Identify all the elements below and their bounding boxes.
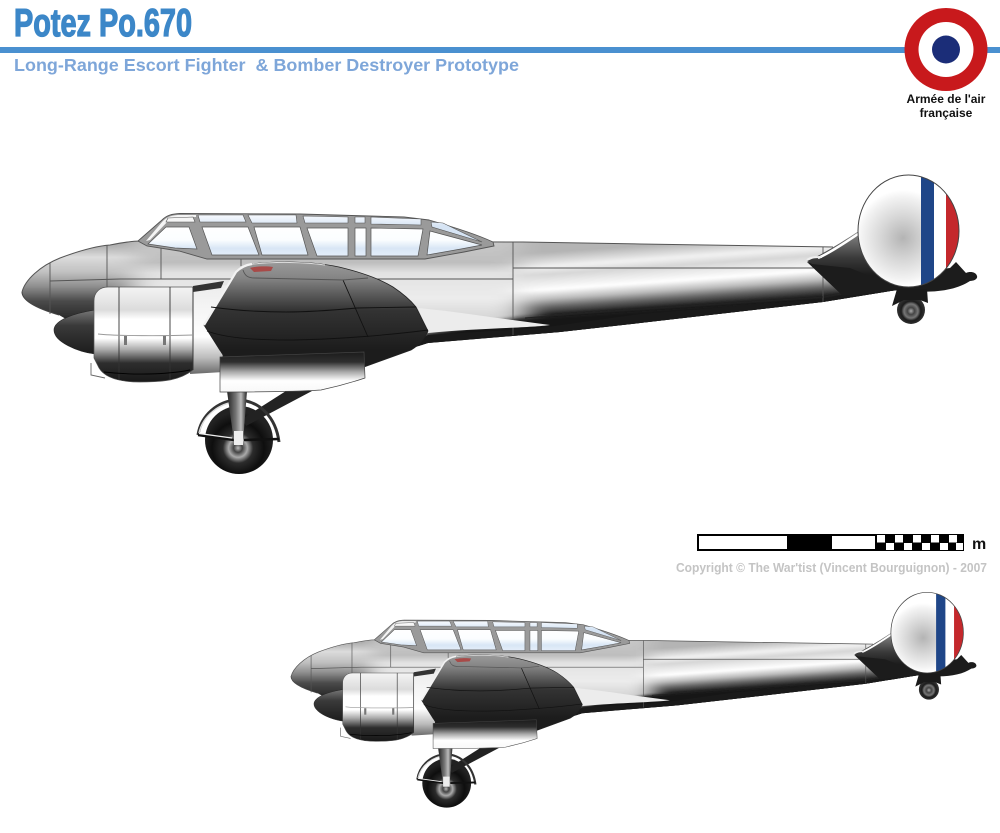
scale unit: m: [972, 536, 986, 553]
tail fin with French flag stripes: [858, 170, 961, 295]
roundel caption: française: [920, 106, 973, 120]
icon: red hatch: [250, 266, 273, 272]
roundel caption: Armée de l'air: [907, 92, 986, 106]
copyright: Copyright © The War'tist (Vincent Bourguignon) - 2007: [676, 561, 987, 575]
scale bar: [697, 534, 964, 551]
landing gear door: [220, 352, 365, 392]
fuselage: [0, 235, 920, 360]
nacelle rear section: [190, 284, 236, 374]
title: Potez Po.670: [14, 2, 192, 45]
exhaust outline: [91, 363, 105, 378]
tail wheel: [892, 289, 928, 324]
cockpit canopy: [138, 214, 494, 259]
main landing gear: [198, 391, 312, 474]
white wing fillet flash: [418, 308, 550, 333]
panel lines: [50, 242, 825, 335]
propeller spinner: [54, 310, 95, 354]
small aircraft side view: [246, 589, 976, 808]
canopy windows: [148, 227, 482, 256]
canopy upper glazing: [166, 215, 482, 242]
large aircraft side view: [0, 170, 977, 474]
header rule: [0, 47, 1000, 53]
tail cone and fillet: [807, 231, 977, 296]
icon: French air force roundel: [904, 8, 988, 91]
subtitle: Long-Range Escort Fighter & Bomber Destroyer Prototype: [14, 55, 519, 75]
engine nacelle: [94, 287, 193, 382]
wing section: [204, 262, 428, 376]
wing panel lines: [207, 270, 428, 340]
checker section: [877, 535, 963, 550]
roundel caption: [907, 92, 986, 120]
